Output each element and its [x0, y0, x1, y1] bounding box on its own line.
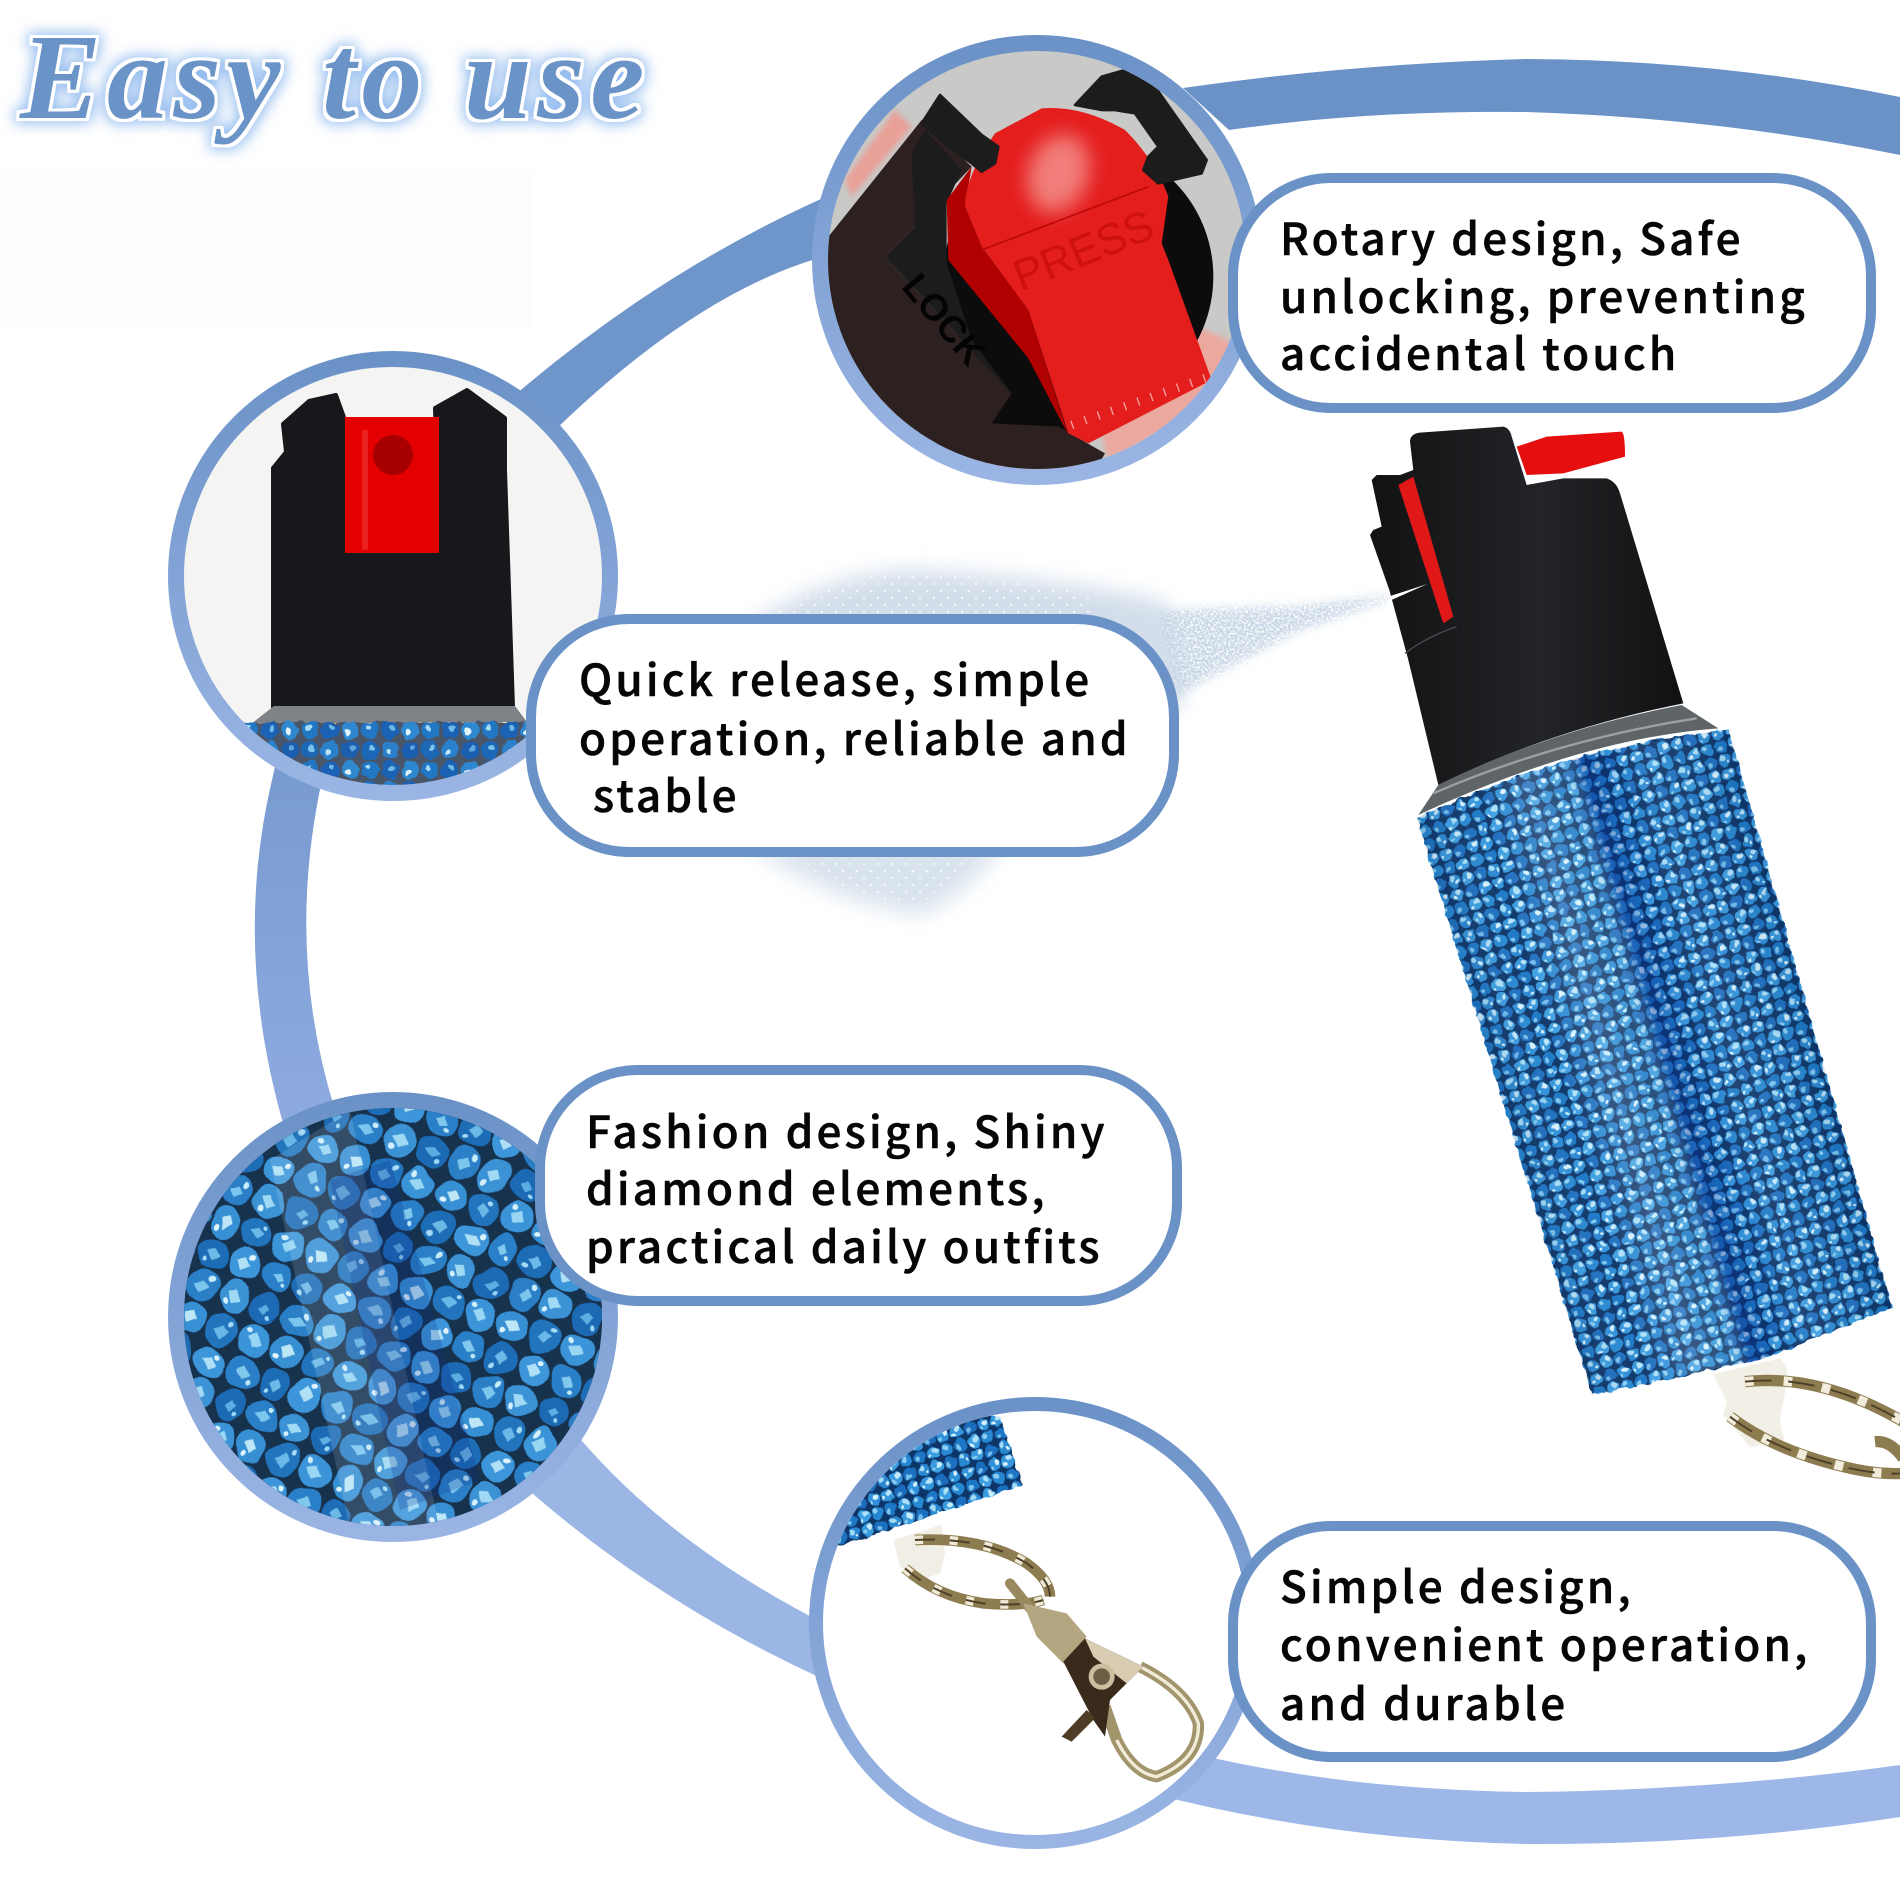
callout: simple design: and durable [1280, 1669, 1568, 1733]
brown cap body [828, 120, 1105, 469]
callout: rotary design: Rotary design, Safe [1280, 204, 1744, 268]
red shaded side [947, 167, 1068, 435]
red top lever [1517, 432, 1625, 475]
split ring [905, 1540, 1050, 1604]
faint background panel [0, 170, 532, 330]
callout: quick release: operation, reliable and [579, 704, 1131, 768]
rhinestone band [244, 720, 526, 785]
callout: rotary design: accidental touch [1280, 319, 1679, 383]
red actuator [345, 417, 439, 553]
clear collar [1418, 705, 1718, 815]
callout: quick release [531, 619, 1174, 852]
callout: fashion design: Fashion design, Shiny [586, 1097, 1108, 1161]
rhinestone body [1417, 730, 1892, 1395]
split key ring [1730, 1380, 1900, 1474]
pink reflection [1100, 327, 1230, 457]
callout: simple design: convenient operation, [1280, 1610, 1810, 1674]
clasp [1010, 1583, 1198, 1777]
LOCK embossed label: LOCK [894, 265, 994, 373]
clear collar [251, 706, 527, 724]
callout: fashion design [540, 1070, 1177, 1301]
callout: fashion design: practical daily outfits [586, 1212, 1103, 1276]
plastic loop [893, 1525, 945, 1578]
right clip [1075, 70, 1207, 183]
nozzle head [273, 390, 513, 707]
callout: simple design: Simple design, [1280, 1552, 1634, 1616]
product: pepper spray bottle [1370, 427, 1900, 1474]
black disc [946, 181, 1214, 373]
moulded line [982, 187, 1148, 250]
PRESS embossed label: PRESS [1007, 201, 1161, 301]
circle: keychain clasp photo [810, 1404, 1254, 1842]
callout: quick release: Quick release, simple [579, 645, 1092, 709]
red side slider [1398, 477, 1453, 623]
rhinestone corner [838, 1416, 1023, 1546]
plastic loop [1713, 1358, 1787, 1447]
red press tab [965, 108, 1212, 443]
head seam [1405, 627, 1457, 653]
textured lock wedge [885, 130, 1012, 393]
callout: rotary design: unlocking, preventing [1280, 262, 1808, 326]
disc shadow under tab [992, 394, 1068, 432]
highlight [1016, 125, 1100, 221]
title: Easy to use [19, 10, 650, 145]
blurred red backdrop [845, 110, 912, 197]
circle: quick release nozzle photo [176, 359, 610, 807]
left clip [922, 95, 998, 172]
callout: fashion design: diamond elements, [586, 1154, 1048, 1218]
spray jet [1388, 584, 1427, 601]
circle: rotary lock photo [815, 43, 1254, 503]
grip teeth [1072, 377, 1209, 425]
black head [1370, 427, 1683, 785]
callout: simple design [1233, 1526, 1871, 1757]
circle: rhinestone close-up [168, 1092, 618, 1542]
spray mist [710, 570, 1389, 915]
callout: rotary design [1233, 178, 1871, 408]
callout: quick release: stable [593, 761, 740, 825]
